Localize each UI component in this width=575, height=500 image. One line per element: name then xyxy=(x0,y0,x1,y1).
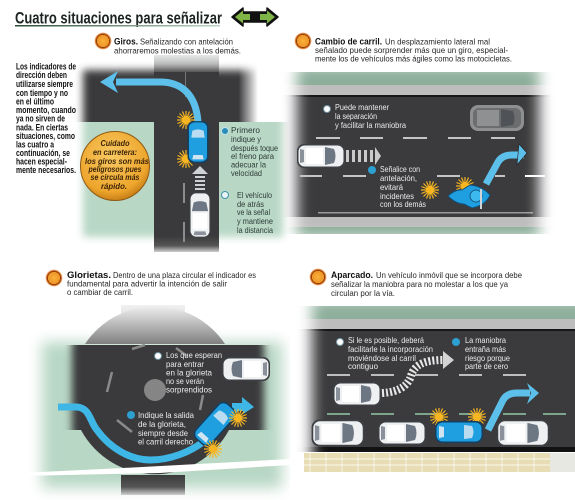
aparcado parked car 3 xyxy=(497,420,549,446)
giros indicator flashes xyxy=(177,111,195,168)
giros note: primero: el freno para xyxy=(231,151,274,161)
aparcado heading bullet xyxy=(310,268,326,286)
cambio note: puede mantener: la separación xyxy=(335,111,377,121)
aparcado note: la maniobra: La maniobra xyxy=(465,335,506,345)
giros intro text: continuación, se xyxy=(16,148,70,158)
giros intro text: nada. En ciertas xyxy=(16,122,68,132)
giros intro text: momento, cuando xyxy=(16,105,76,115)
cambio blue motorcycle xyxy=(448,185,490,209)
glorietas note: los que esperan: en la glorieta xyxy=(166,368,212,378)
glorietas heading text: Dentro de una plaza circular el indicador es xyxy=(113,270,256,280)
callout: cuidado en carretera xyxy=(80,132,150,200)
glorietas flashes xyxy=(204,409,247,458)
title: Cuatro situaciones para señalizar xyxy=(15,10,222,28)
glorietas heading bullet xyxy=(46,270,62,286)
giros note: el vehiculo: de atrás xyxy=(237,199,264,209)
cambio road background xyxy=(270,72,560,234)
aparcado flashes xyxy=(430,408,486,426)
glorietas note: indique la salida: siempre desde xyxy=(138,428,188,438)
giros white car xyxy=(189,192,211,238)
giros striped arrow xyxy=(192,166,208,190)
glorietas waiting car xyxy=(222,357,270,381)
giros intro text xyxy=(16,62,76,175)
glorietas note: los que esperan xyxy=(154,350,222,394)
callout: cuidado en carretera: los giros son más xyxy=(85,156,149,166)
callout: cuidado en carretera: se circula más xyxy=(90,172,140,182)
aparcado note: la maniobra xyxy=(452,335,510,371)
giros intro text: en el último xyxy=(16,96,54,106)
aparcado dotted path arrow xyxy=(382,351,454,393)
giros intro text: ya no sirven de xyxy=(16,114,65,124)
glorietas heading text: o cambiar de carril. xyxy=(67,287,133,297)
cambio flashes xyxy=(421,177,474,199)
cambio note: señalice: con los demás xyxy=(380,199,426,209)
aparcado note: si le es posible: moviéndose al carril xyxy=(348,353,416,363)
cambio heading text xyxy=(315,36,512,64)
callout: cuidado en carretera: en carretera: xyxy=(93,147,137,157)
giros heading bullet xyxy=(94,32,112,50)
giros intro text: hacen especial- xyxy=(16,156,67,166)
aparcado heading text: señalizar la maniobra para no molestar a los que ya xyxy=(331,279,508,289)
giros note: primero: indique y xyxy=(231,134,262,144)
callout: cuidado en carretera: rápido. xyxy=(101,181,127,191)
cambio heading text: señalado puede sorprender más que un giro, especial- xyxy=(315,45,508,55)
glorietas note: los que esperan: no se verán xyxy=(166,376,204,386)
giros heading text xyxy=(114,36,241,56)
aparcado note: si le es posible xyxy=(336,335,433,371)
aparcado blue car xyxy=(435,421,483,443)
giros intro text: dirección deben xyxy=(16,70,67,80)
cambio heading text: Cambio de carril. xyxy=(315,36,382,46)
giros intro text: situaciones, como xyxy=(16,131,75,141)
glorietas note: los que esperan: Los que esperan xyxy=(166,350,222,360)
glorietas blue path xyxy=(58,397,254,460)
glorietas road background xyxy=(20,305,290,500)
cambio note: puede mantener xyxy=(324,102,406,130)
giros heading text: ahorraremos molestias a los demás. xyxy=(114,46,241,56)
cambio note: señalice: Señalice con xyxy=(380,164,420,174)
cambio note: señalice: evitará xyxy=(380,182,403,192)
aparcado heading text: circulan por la vía. xyxy=(331,288,395,298)
cambio heading text: mente los de vehículos más ágiles como las motocicletas. xyxy=(315,54,512,64)
aparcado heading text: Un vehículo inmóvil que se incorpora debe xyxy=(376,270,522,280)
aparcado note: si le es posible: contiguo xyxy=(348,361,378,371)
cambio note: señalice: antelación, xyxy=(380,173,417,183)
giros blue turn arrow xyxy=(100,71,198,122)
giros note: el vehiculo xyxy=(222,190,273,235)
callout: cuidado en carretera: Cuidado xyxy=(100,138,130,148)
aparcado heading text: Aparcado. xyxy=(331,270,373,280)
cambio note: señalice: incidentes xyxy=(380,191,414,201)
giros intro text: utilizarse siempre xyxy=(16,79,73,89)
cambio striped arrow xyxy=(346,147,381,165)
giros note: el vehiculo: El vehículo xyxy=(237,190,272,200)
glorietas note: indique la salida xyxy=(127,410,194,446)
giros intro text: mente necesarios. xyxy=(16,165,76,175)
giros heading text: Giros. xyxy=(114,36,138,46)
aparcado heading text xyxy=(331,270,522,298)
aparcado pavement xyxy=(304,453,575,472)
aparcado note: la maniobra: riesgo porque xyxy=(465,353,510,363)
cambio note: puede mantener: Puede mantener xyxy=(335,102,389,112)
aparcado note: la maniobra: parte de cero xyxy=(465,361,508,371)
cambio note: puede mantener: y facilitar la maniobra xyxy=(335,120,406,130)
glorietas heading text: fundamental para advertir la intención de salir xyxy=(67,278,227,288)
cambio heading text: Un desplazamiento lateral mal xyxy=(385,36,490,46)
giros note: primero xyxy=(222,125,278,178)
giros note: el vehiculo: y mantiene xyxy=(237,216,273,226)
giros note: primero: Primero xyxy=(231,125,260,135)
glorietas note: indique la salida: el carril derecho xyxy=(138,436,193,446)
giros note: primero: después toque xyxy=(231,143,278,153)
glorietas note: los que esperan: para entrar xyxy=(166,359,204,369)
aparcado parked car 2 xyxy=(378,421,426,445)
aparcado note: la maniobra: entraña más xyxy=(465,344,506,354)
giros road background xyxy=(76,55,288,252)
cambio heading bullet xyxy=(294,32,312,50)
giros blue car xyxy=(188,121,208,163)
panel: giros xyxy=(16,32,299,262)
glorietas heading text: Glorietas. xyxy=(67,270,111,280)
glorietas note: indique la salida: Indique la salida xyxy=(138,410,194,420)
aparcado note: si le es posible: Si le es posible, deberá xyxy=(348,335,424,345)
panel: glorietas xyxy=(20,270,290,500)
glorietas note: indique la salida: de la glorieta, xyxy=(138,419,186,429)
giros note: el vehiculo: la distancia xyxy=(237,225,273,235)
icon: turn signal arrows xyxy=(232,8,278,26)
giros intro text: Los indicadores de xyxy=(16,62,76,72)
cambio gray car xyxy=(470,105,524,131)
panel: cambio de carril xyxy=(270,32,560,234)
aparcado moving car xyxy=(333,382,381,406)
aparcado road background xyxy=(290,306,575,452)
callout: cuidado en carretera: peligrosos pues xyxy=(88,164,142,174)
giros note: primero: adecuar la xyxy=(231,160,266,170)
giros intro text: las cuatro a xyxy=(16,140,54,150)
glorietas note: los que esperan: sorprendidos xyxy=(166,384,212,394)
giros note: el vehiculo: ve la señal xyxy=(237,207,270,217)
panel: aparcado xyxy=(290,268,575,472)
cambio blue arrow xyxy=(486,144,527,184)
cambio white car xyxy=(297,144,345,168)
glorietas blue car xyxy=(191,399,239,449)
aparcado lane dashes xyxy=(327,374,566,415)
cambio note: señalice xyxy=(368,164,426,209)
giros heading text: Señalizando con antelación xyxy=(140,36,233,46)
aparcado note: si le es posible: facilitarle la incorporación xyxy=(348,344,433,354)
giros note: primero: velocidad xyxy=(231,168,262,178)
roundabout island and lane ring xyxy=(107,345,203,432)
aparcado blue arrow xyxy=(488,383,539,430)
cambio lane dashes xyxy=(300,137,545,177)
aparcado parked car 1 xyxy=(312,420,364,446)
glorietas heading text xyxy=(67,270,256,297)
giros intro text: con tiempo y no xyxy=(16,88,68,98)
